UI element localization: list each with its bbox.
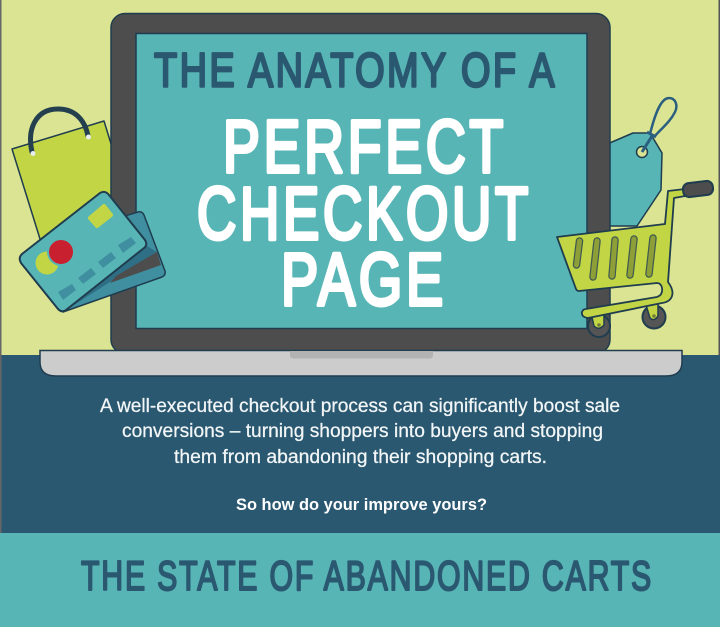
laptop	[40, 14, 682, 376]
intro text: A well-executed checkout process can significantly boost sale	[100, 396, 620, 417]
title line: page: PAGE	[281, 238, 447, 321]
intro text: conversions – turning shoppers into buyers and stopping	[122, 421, 603, 442]
icon: shopping bag	[12, 109, 112, 255]
cart wheels	[588, 303, 666, 337]
title line: checkout: CHECKOUT	[197, 172, 532, 255]
cart handle grip	[682, 180, 714, 198]
icon: credit cards	[20, 192, 165, 312]
laptop screen	[136, 34, 587, 328]
title	[154, 45, 557, 321]
laptop base	[40, 350, 682, 376]
laptop notch	[290, 351, 433, 358]
question text: So how do your improve yours?	[236, 495, 487, 514]
cart body and frame	[557, 189, 685, 318]
laptop lid	[111, 14, 610, 354]
cart slots	[576, 238, 653, 277]
title line: the anatomy of a: THE ANATOMY OF A	[154, 45, 557, 98]
title line: perfect: PERFECT	[223, 105, 507, 188]
intro text: them from abandoning their shopping carts.	[174, 447, 547, 468]
intro text	[100, 396, 620, 468]
icon: price tag	[605, 98, 676, 226]
icon: shopping cart	[557, 180, 714, 337]
